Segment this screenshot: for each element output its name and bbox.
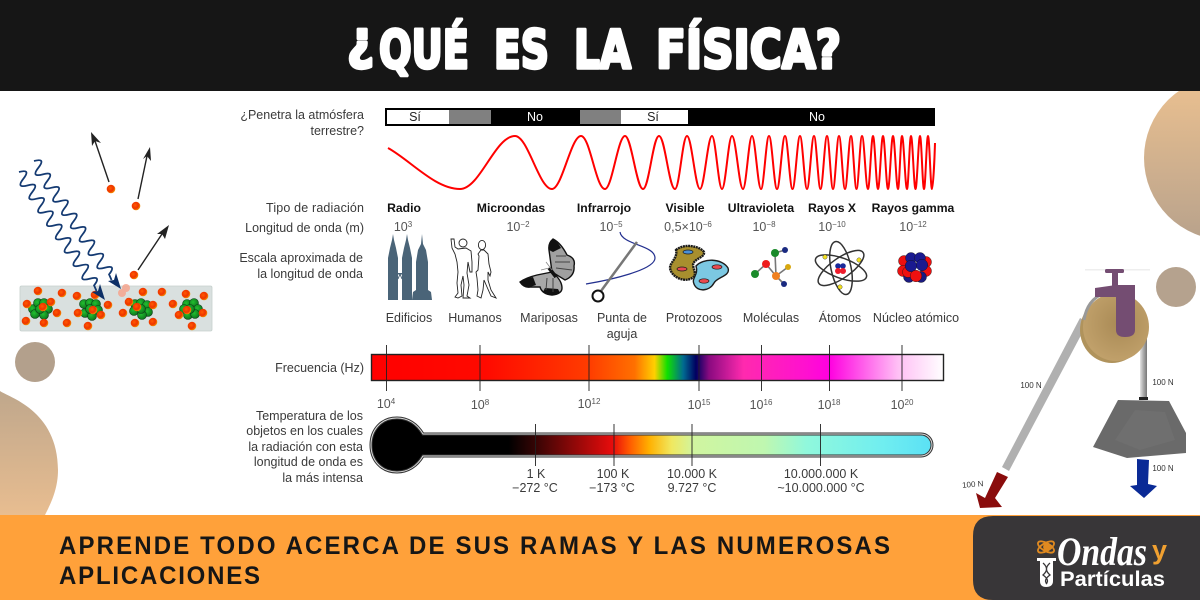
frequency scale labels: 20 xyxy=(904,398,914,407)
row label: temperature xyxy=(246,409,363,485)
force labels xyxy=(962,378,1174,490)
ejected electrons xyxy=(107,185,140,279)
icon: humans xyxy=(451,239,496,298)
spectrum diagram xyxy=(239,108,959,495)
radiation type names: Rayos X xyxy=(808,201,857,215)
temperature labels: 1 K xyxy=(527,467,546,481)
temperature labels: 100 K xyxy=(597,467,630,481)
wavelength values xyxy=(394,220,927,234)
title: LA xyxy=(574,20,631,81)
radiation type names: Radio xyxy=(387,201,421,215)
weight xyxy=(1093,397,1186,458)
force labels: 100 N xyxy=(1152,464,1174,473)
object scale labels: Núcleo atómico xyxy=(873,311,959,325)
logo wordmark: Ondas xyxy=(1057,529,1147,574)
atmosphere penetration bar: Sí xyxy=(647,110,659,124)
wavelength values: 10 xyxy=(394,220,408,234)
decorative blob: top right xyxy=(1144,76,1200,240)
ejection arrows xyxy=(91,132,169,270)
frequency scale labels: 12 xyxy=(592,397,601,406)
red force arrow xyxy=(976,472,1008,508)
left rope xyxy=(1002,318,1088,471)
decorative circle: right xyxy=(1156,267,1196,307)
title: QUÉ xyxy=(379,18,469,81)
frequency scale labels xyxy=(377,397,914,412)
thermometer xyxy=(371,418,932,472)
logo icon: atom xyxy=(1036,539,1056,555)
frequency scale labels: 10 xyxy=(818,398,832,412)
ghost electrons xyxy=(118,284,130,297)
wavelength values: 10 xyxy=(899,220,913,234)
title: ES xyxy=(494,20,549,81)
title: FÍSICA? xyxy=(656,18,841,81)
ceiling shadow xyxy=(1085,269,1150,270)
pulley wheel xyxy=(1080,293,1149,363)
logo wordmark: Partículas xyxy=(1060,568,1165,591)
row labels: type, wavelength, scale: la longitud de onda xyxy=(257,267,363,281)
frequency scale labels: 10 xyxy=(471,398,485,412)
object scale labels: Mariposas xyxy=(520,311,578,325)
object scale labels: Átomos xyxy=(819,310,861,325)
radiation type names: Infrarrojo xyxy=(577,201,631,215)
row labels: type, wavelength, scale: Tipo de radiación xyxy=(266,201,364,215)
temperature labels xyxy=(512,467,865,495)
wavelength values: 0,5×10 xyxy=(664,220,703,234)
temperature labels: 10.000 K xyxy=(667,467,718,481)
atmosphere penetration bar: No xyxy=(527,110,543,124)
row label: temperature: objetos en los cuales xyxy=(246,424,363,438)
incoming wavy rays xyxy=(14,158,117,294)
icon: buildings xyxy=(388,234,432,300)
force labels: 100 N xyxy=(1152,378,1174,387)
decorative circle: left xyxy=(15,342,55,382)
wavelength values: 10 xyxy=(599,220,613,234)
radiation type names: Visible xyxy=(665,201,705,215)
frequency scale labels: 10 xyxy=(578,397,592,411)
atmosphere penetration bar: Sí xyxy=(409,110,421,124)
atmosphere penetration bar xyxy=(385,108,935,126)
blue force arrow xyxy=(1130,459,1157,498)
row labels: type, wavelength, scale: Escala aproximada de xyxy=(239,251,363,265)
object scale labels: aguja xyxy=(607,327,637,341)
wavelength values: 10 xyxy=(752,220,766,234)
object scale labels: Humanos xyxy=(448,311,502,325)
object scale labels xyxy=(386,310,959,341)
wavelength values: 3 xyxy=(408,220,413,229)
row label: frequency: Frecuencia (Hz) xyxy=(275,361,364,375)
wavelength values: −10 xyxy=(832,220,846,229)
force labels: 100 N xyxy=(1020,381,1042,390)
footer headline xyxy=(59,533,890,590)
frequency scale labels: 10 xyxy=(377,397,391,411)
row label: temperature: Temperatura de los xyxy=(256,409,363,423)
frequency scale labels: 10 xyxy=(688,398,702,412)
logo wordmark: y xyxy=(1152,535,1167,565)
icon: needle and thread xyxy=(586,232,655,302)
object scale labels: Punta de xyxy=(597,311,647,325)
header band xyxy=(0,0,1200,91)
decorative blob: bottom left xyxy=(0,391,58,515)
right rope xyxy=(1140,338,1147,398)
row label: atmosphere: ¿Penetra la atmósfera xyxy=(240,108,364,122)
wavelength values: 10 xyxy=(818,220,832,234)
row label: atmosphere: terrestre? xyxy=(310,124,364,138)
footer band xyxy=(0,515,1200,600)
temperature labels: −272 °C xyxy=(512,481,558,495)
temperature labels: ~10.000.000 °C xyxy=(777,481,865,495)
footer headline: APRENDE TODO ACERCA DE SUS RAMAS Y LAS NUMEROSAS xyxy=(59,533,890,560)
radiation type names xyxy=(387,201,955,215)
temperature labels: 10.000.000 K xyxy=(784,467,859,481)
radiation type names: Rayos gamma xyxy=(872,201,955,215)
electrons in plate xyxy=(22,287,208,330)
title: ¿ xyxy=(347,10,374,71)
wavelength values: 10 xyxy=(506,220,520,234)
row label: atmosphere xyxy=(240,108,364,138)
logo icon: flask xyxy=(1037,558,1056,587)
radiation type names: Ultravioleta xyxy=(728,201,794,215)
ray arrowheads xyxy=(92,273,121,300)
title xyxy=(347,10,841,81)
wavelength values: −2 xyxy=(520,220,530,229)
right illustration: pulley xyxy=(962,269,1186,508)
icon: butterfly xyxy=(520,239,574,295)
logo panel xyxy=(973,516,1200,600)
atmosphere penetration bar: No xyxy=(809,110,825,124)
icon: molecule xyxy=(751,247,791,287)
left illustration: photoelectric effect xyxy=(14,132,212,331)
frequency scale labels: 10 xyxy=(750,398,764,412)
temperature labels: 9.727 °C xyxy=(668,481,716,495)
frequency scale labels: 10 xyxy=(891,398,904,412)
frequency bar xyxy=(372,345,944,391)
object scale labels: Moléculas xyxy=(743,311,799,325)
wavelength values: −12 xyxy=(913,220,927,229)
wavelength values: −6 xyxy=(703,220,712,229)
object scale labels: Edificios xyxy=(386,311,432,325)
row label: temperature: la más intensa xyxy=(282,471,363,485)
icon: atom xyxy=(812,240,870,296)
frequency scale labels: 18 xyxy=(832,398,841,407)
purple bracket xyxy=(1095,269,1135,337)
frequency scale labels: 4 xyxy=(391,397,396,406)
metal plate xyxy=(20,286,212,331)
frequency scale labels: 16 xyxy=(764,398,773,407)
frequency scale labels: 8 xyxy=(485,398,490,407)
atomic nuclei clusters xyxy=(28,298,202,320)
radiation type names: Microondas xyxy=(477,201,545,215)
temperature labels: −173 °C xyxy=(589,481,635,495)
icon: protozoa xyxy=(670,246,728,290)
footer headline: APLICACIONES xyxy=(59,563,260,590)
red wave chirp xyxy=(388,136,935,189)
row label: temperature: la radiación con esta xyxy=(248,440,363,454)
icon: atomic nucleus xyxy=(898,252,932,282)
row labels: type, wavelength, scale: Longitud de onda (m) xyxy=(245,221,364,235)
frequency scale labels: 15 xyxy=(702,398,711,407)
wavelength values: −8 xyxy=(766,220,776,229)
wavelength values: −5 xyxy=(613,220,623,229)
force labels: 100 N xyxy=(962,479,984,490)
row labels: type, wavelength, scale xyxy=(239,201,364,281)
object scale labels: Protozoos xyxy=(666,311,722,325)
row label: temperature: longitud de onda es xyxy=(254,455,363,469)
